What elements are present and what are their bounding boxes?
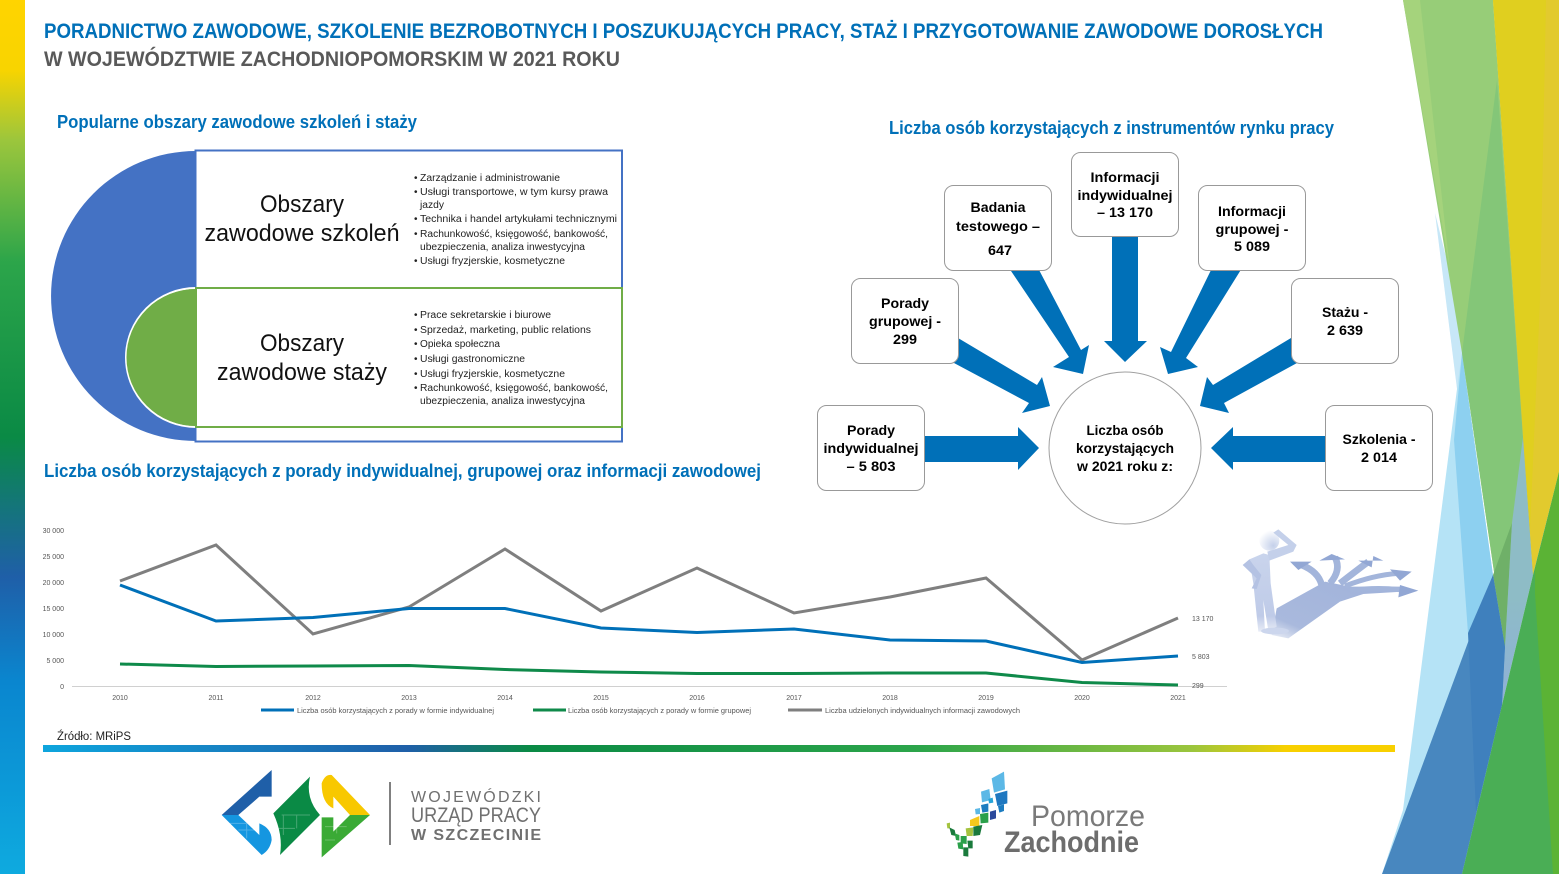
box: internship xyxy=(1292,278,1398,364)
box: group advice: Porady xyxy=(881,295,929,311)
box: individual advice: – 5 803 xyxy=(846,458,896,474)
box: training: Szkolenia - xyxy=(1342,431,1416,447)
box: group information: Informacji xyxy=(1218,203,1286,219)
internship areas label: Obszary xyxy=(260,330,344,357)
y axis labels xyxy=(43,528,64,691)
box: group advice: grupowej - xyxy=(869,313,941,329)
box: group advice: 299 xyxy=(893,331,917,347)
training areas list: • xyxy=(414,229,418,240)
internship areas list xyxy=(414,310,608,407)
arrow: tests to centre xyxy=(1009,268,1089,374)
centre circle: korzystających xyxy=(1076,440,1174,456)
x axis labels: 2017 xyxy=(786,695,802,702)
data labels: 13 170 xyxy=(1192,616,1214,623)
panel: instruments radial diagram xyxy=(818,152,1432,524)
bottom gradient bar xyxy=(43,745,1395,752)
series: individual information xyxy=(120,545,1178,660)
heading: popular areas: Popularne obszary zawodowe szkoleń i staży xyxy=(57,112,417,132)
y axis labels: 30 000 xyxy=(43,528,64,535)
box: internship: Stażu - xyxy=(1322,304,1368,320)
y axis labels: 15 000 xyxy=(43,606,64,613)
internship areas list: • xyxy=(414,383,418,394)
y axis labels: 10 000 xyxy=(43,632,64,639)
centre circle: w 2021 roku z: xyxy=(1076,458,1173,474)
training areas list: Usługi transportowe, w tym kursy prawa xyxy=(420,187,608,198)
centre circle xyxy=(1049,372,1201,524)
logo wording xyxy=(411,787,541,844)
y axis labels: 5 000 xyxy=(46,658,64,665)
arrow: individual information to centre xyxy=(1104,232,1147,362)
data labels: 5 803 xyxy=(1192,654,1210,661)
arrow: group information to centre xyxy=(1160,268,1242,374)
internship areas list: Sprzedaż, marketing, public relations xyxy=(420,325,591,336)
logo mark xyxy=(947,772,1007,857)
logo: WUP Szczecin xyxy=(222,770,541,857)
data labels xyxy=(1192,616,1214,690)
box: tests: 647 xyxy=(988,242,1012,258)
logo wording: Pomorze xyxy=(1031,800,1145,833)
training areas list: ubezpieczenia, analiza inwestycyjna xyxy=(420,242,585,253)
training areas list: • xyxy=(414,214,418,225)
box: individual information: Informacji xyxy=(1090,169,1160,185)
right decorative polygons xyxy=(1382,0,1559,874)
logo wording: URZĄD PRACY xyxy=(411,804,541,827)
internship areas list: Usługi gastronomiczne xyxy=(420,354,525,365)
x axis labels: 2020 xyxy=(1074,695,1090,702)
arrow: group advice to centre xyxy=(954,338,1050,413)
box: individual information xyxy=(1072,152,1178,236)
title xyxy=(44,20,1323,71)
box: group advice xyxy=(852,278,958,364)
x axis labels: 2014 xyxy=(497,695,513,702)
internship areas label: zawodowe staży xyxy=(217,359,387,386)
legend xyxy=(261,708,1020,715)
training areas list: Zarządzanie i administrowanie xyxy=(420,173,560,184)
training areas list: • xyxy=(414,187,418,198)
x axis labels xyxy=(112,695,1186,702)
x axis labels: 2010 xyxy=(112,695,128,702)
internship areas label xyxy=(217,330,387,386)
training areas list: Rachunkowość, księgowość, bankowość, xyxy=(420,229,608,240)
logo mark xyxy=(222,770,370,857)
arrow: training to centre xyxy=(1211,427,1330,470)
box: internship: 2 639 xyxy=(1327,322,1363,338)
internship areas list: • xyxy=(414,369,418,380)
centre circle: Liczba osób xyxy=(1086,422,1164,438)
box: individual advice: Porady xyxy=(847,422,895,438)
series: group advice xyxy=(120,664,1178,685)
box: individual information: indywidualnej xyxy=(1078,187,1172,203)
box: group information: grupowej - xyxy=(1216,221,1289,237)
x axis labels: 2011 xyxy=(208,695,224,702)
legend: Liczba osób korzystających z porady w formie indywidualnej xyxy=(297,708,494,715)
logo wording: WOJEWÓDZKI xyxy=(411,787,541,806)
logo wording: W SZCZECINIE xyxy=(411,827,541,844)
data labels: 299 xyxy=(1192,683,1204,690)
training areas list: Technika i handel artykułami technicznymi xyxy=(420,214,617,225)
line chart xyxy=(43,528,1227,715)
y axis labels: 0 xyxy=(60,684,64,691)
series: individual advice xyxy=(120,585,1178,662)
training areas label: zawodowe szkoleń xyxy=(204,220,400,247)
box: training: 2 014 xyxy=(1361,449,1397,465)
box: group information: 5 089 xyxy=(1234,238,1270,254)
training areas list: Usługi fryzjerskie, kosmetyczne xyxy=(420,256,565,267)
internship areas list: Rachunkowość, księgowość, bankowość, xyxy=(420,383,608,394)
internship areas list: • xyxy=(414,310,418,321)
box: tests: Badania xyxy=(970,199,1026,215)
x axis labels: 2015 xyxy=(593,695,609,702)
x axis labels: 2021 xyxy=(1170,695,1186,702)
box: group information xyxy=(1198,186,1306,270)
x axis labels: 2019 xyxy=(978,695,994,702)
box: individual information: – 13 170 xyxy=(1097,204,1153,220)
box: training xyxy=(1326,406,1432,490)
arrow: internship to centre xyxy=(1200,338,1297,413)
training areas list: • xyxy=(414,256,418,267)
internship areas list: • xyxy=(414,339,418,350)
internship areas list: Opieka społeczna xyxy=(420,339,500,350)
box: individual advice xyxy=(818,406,924,490)
box: tests xyxy=(944,186,1052,270)
training areas list: jazdy xyxy=(419,200,444,211)
internship areas list: Usługi fryzjerskie, kosmetyczne xyxy=(420,369,565,380)
title: PORADNICTWO ZAWODOWE, SZKOLENIE BEZROBOTNYCH I POSZUKUJĄCYCH PRACY, STAŻ I PRZYGOTOWANIE ZAWODOWE DOROSŁYCH xyxy=(44,20,1323,43)
x axis labels: 2013 xyxy=(401,695,417,702)
x axis labels: 2016 xyxy=(689,695,705,702)
internship areas list: • xyxy=(414,354,418,365)
legend: Liczba udzielonych indywidualnych informacji zawodowych xyxy=(825,708,1020,715)
training areas label: Obszary xyxy=(260,191,344,218)
internship areas list: ubezpieczenia, analiza inwestycyjna xyxy=(420,396,585,407)
y axis labels: 20 000 xyxy=(43,580,64,587)
panel: occupational areas diagram xyxy=(51,150,622,442)
source note: Źródło: MRiPS xyxy=(57,730,131,743)
heading: labour market instruments: Liczba osób korzystających z instrumentów rynku pracy xyxy=(889,118,1334,138)
logo wording xyxy=(1004,800,1145,859)
box: tests: testowego – xyxy=(956,218,1040,234)
heading: line chart: Liczba osób korzystających z porady indywidualnej, grupowej oraz informacji zawodowej xyxy=(44,461,761,481)
internship areas list: Prace sekretarskie i biurowe xyxy=(420,310,551,321)
logo wording: Zachodnie xyxy=(1004,826,1139,859)
x axis labels: 2012 xyxy=(305,695,321,702)
x axis labels: 2018 xyxy=(882,695,898,702)
internship areas list: • xyxy=(414,325,418,336)
left gradient band xyxy=(0,0,25,874)
training areas label xyxy=(204,191,400,247)
training areas list xyxy=(414,173,617,267)
y axis labels: 25 000 xyxy=(43,554,64,561)
box: individual advice: indywidualnej xyxy=(824,440,918,456)
training areas list: • xyxy=(414,173,418,184)
logo: Pomorze Zachodnie xyxy=(947,772,1145,859)
arrow: individual advice to centre xyxy=(920,427,1039,470)
legend: Liczba osób korzystających z porady w formie grupowej xyxy=(568,708,751,715)
icon: person at crossroads xyxy=(1243,529,1418,638)
title: W WOJEWÓDZTWIE ZACHODNIOPOMORSKIM W 2021 ROKU xyxy=(44,47,620,71)
